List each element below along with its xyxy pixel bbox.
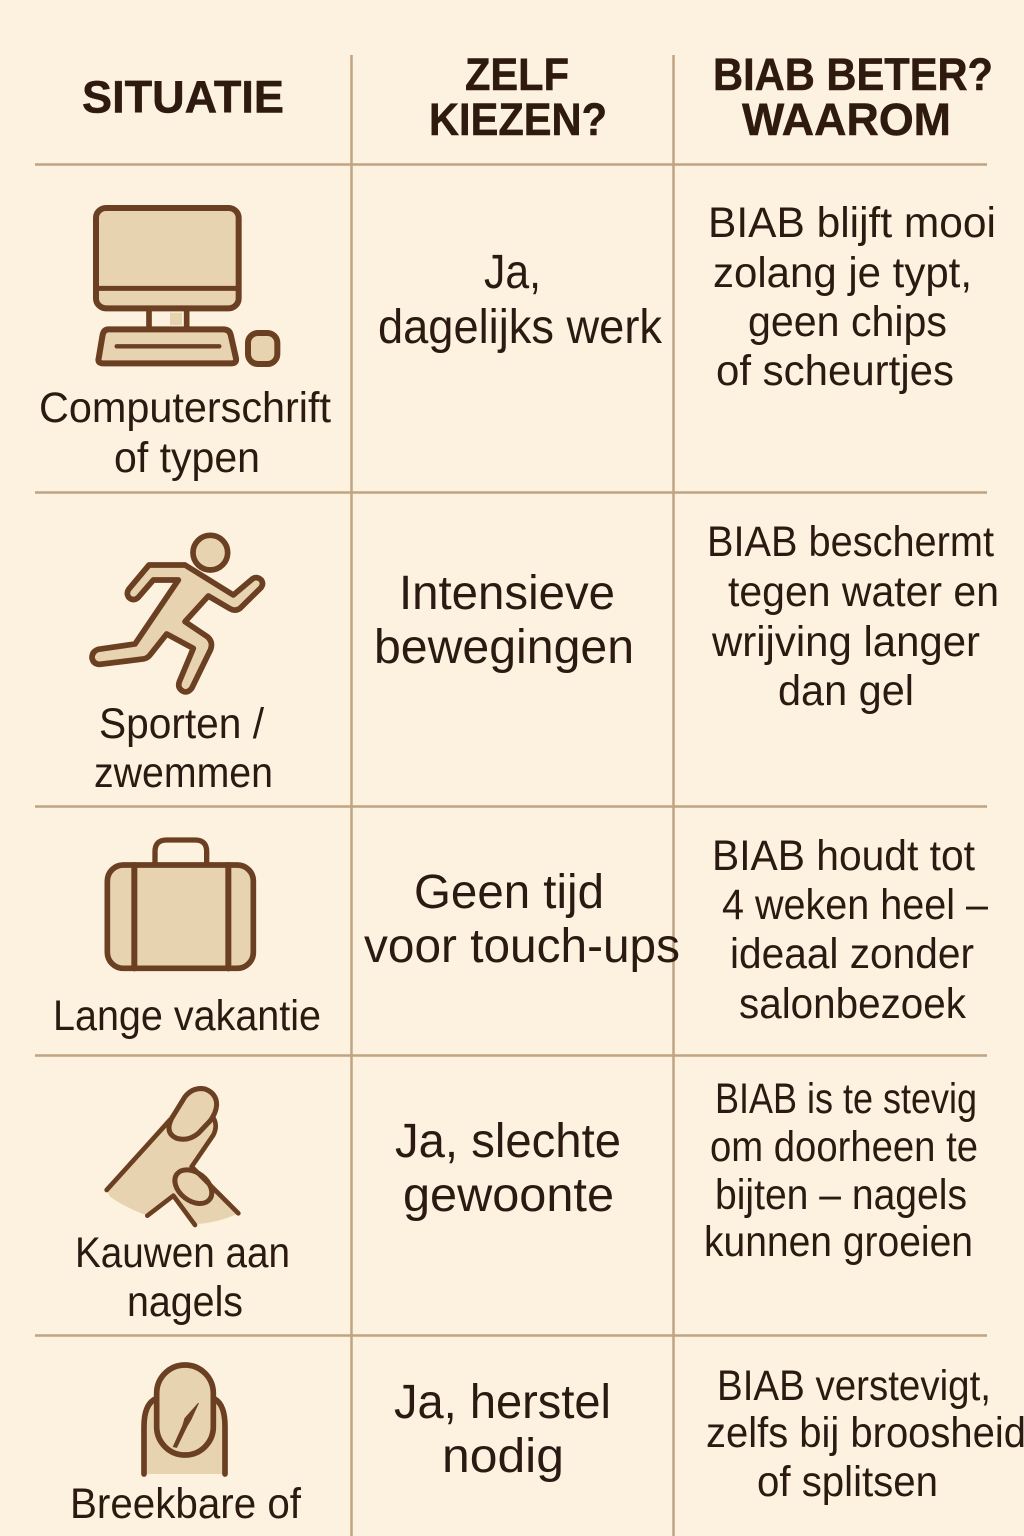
reason text: dan gel [778,667,914,715]
choice text: Ja, [484,246,541,299]
icon: cracked nail [144,1365,225,1474]
reason text: BIAB beschermt [707,518,994,566]
reason text [712,832,988,1028]
heading: zelf kiezen: ZELF [465,49,569,100]
choice text [394,1376,611,1483]
reason text [706,1362,1024,1506]
reason text: BIAB houdt tot [712,832,975,880]
choice text: bewegingen [374,621,634,674]
header row [82,49,993,145]
reason text [707,518,999,715]
row: computerschrift [39,199,996,482]
row: sporten [92,518,999,797]
icon: runner [92,535,263,692]
label: kauwen aan nagels: nagels [127,1278,243,1326]
reason text: tegen water en [728,568,999,616]
reason text: BIAB is te stevig [715,1075,977,1123]
reason text [704,1075,978,1266]
label: sporten zwemmen: Sporten / [99,700,264,748]
reason text: of splitsen [757,1458,938,1506]
heading: biab beter waarom: BIAB BETER? [713,49,993,100]
reason text: zolang je typt, [713,249,972,297]
heading: zelf kiezen [429,49,607,145]
choice text [395,1115,621,1222]
label: kauwen aan nagels: Kauwen aan [75,1229,290,1277]
label: sporten zwemmen [94,700,273,797]
reason text: ideaal zonder [730,930,974,978]
choice text: Intensieve [399,567,615,620]
label: breekbare of: Breekbare of [70,1480,302,1528]
label: lange vakantie: Lange vakantie [53,992,321,1040]
choice text: Geen tijd [414,866,604,919]
reason text: om doorheen te [710,1123,978,1171]
row: vakantie [53,832,988,1040]
heading: situatie: SITUATIE [82,72,284,122]
choice text: Ja, slechte [395,1115,621,1168]
heading: zelf kiezen: KIEZEN? [429,94,607,145]
label: computerschrift of typen: Computerschrift [39,384,331,432]
label: kauwen aan nagels [75,1229,290,1326]
reason text: BIAB verstevigt, [717,1362,991,1410]
choice text [378,246,663,354]
icon: suitcase [107,840,253,968]
choice text [364,866,680,973]
choice text [374,567,634,674]
choice text: nodig [442,1430,564,1483]
icon: computer [96,208,277,364]
reason text: bijten – nagels [715,1171,967,1219]
label: sporten zwemmen: zwemmen [94,749,273,797]
choice text: Ja, herstel [394,1376,611,1429]
reason text: 4 weken heel – [722,881,988,929]
heading: biab beter waarom [713,49,993,145]
choice text: dagelijks werk [378,301,663,354]
row: breekbare nagels [70,1362,1024,1528]
choice text: gewoonte [403,1169,614,1222]
reason text: kunnen groeien [704,1218,973,1266]
reason text [708,199,996,395]
choice text: voor touch-ups [364,920,680,973]
reason text: geen chips [748,298,947,346]
reason text: BIAB blijft mooi [708,199,996,247]
reason text: wrijving langer [711,618,980,666]
row: kauwen [75,1075,978,1326]
reason text: salonbezoek [739,980,966,1028]
reason text: of scheurtjes [716,347,954,395]
icon: finger biting nail [107,1089,238,1225]
heading: biab beter waarom: WAAROM [742,94,951,145]
label: computerschrift of typen [39,384,331,482]
label: computerschrift of typen: of typen [114,434,260,482]
